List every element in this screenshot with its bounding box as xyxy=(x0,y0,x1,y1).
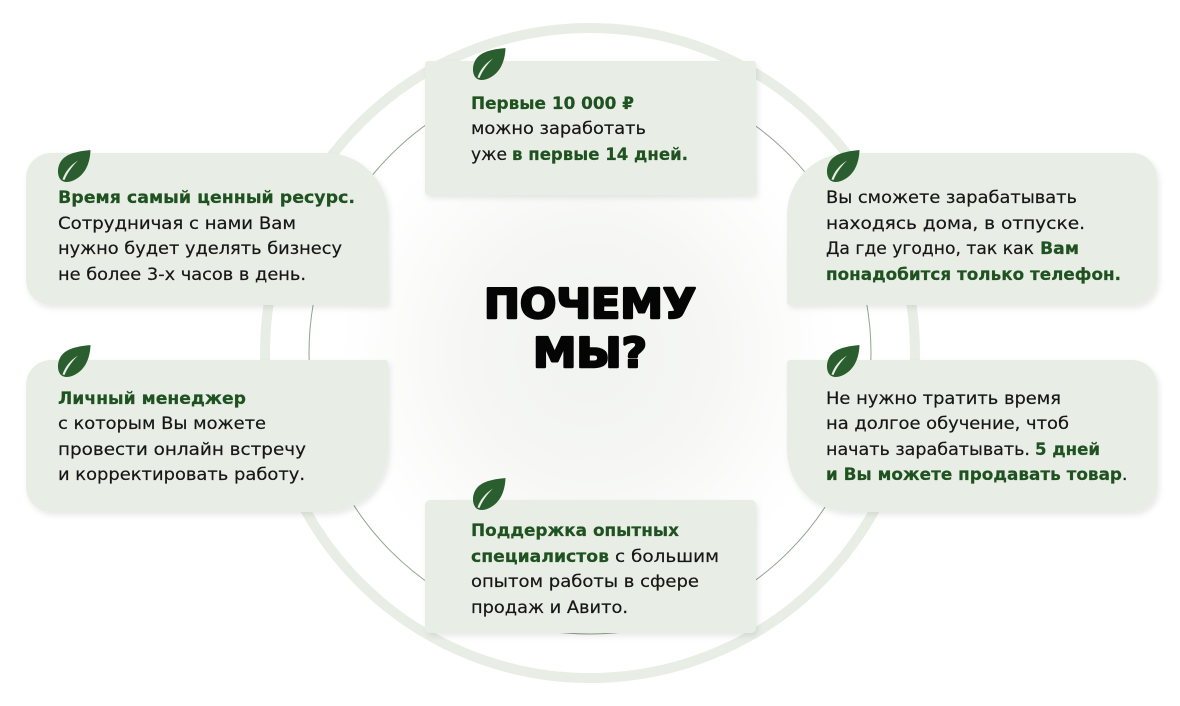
panel text: с большим xyxy=(615,547,719,567)
panel text: не более 3-х часов в день. xyxy=(58,265,306,285)
panel text: 5 дней xyxy=(1035,440,1100,460)
panel text: находясь дома, в отпуске. xyxy=(826,214,1085,234)
panel: first earnings xyxy=(425,48,756,195)
panel text: и корректировать работу. xyxy=(58,465,305,485)
panel text: провести онлайн встречу xyxy=(58,440,306,460)
outer ring xyxy=(265,28,915,678)
panel text: Личный менеджер xyxy=(58,389,246,409)
panel text: опытом работы в сфере xyxy=(471,572,699,592)
inner thin ring xyxy=(309,72,871,634)
panel text: Не нужно тратить время xyxy=(826,389,1061,409)
panel: work from anywhere xyxy=(787,150,1157,305)
panel text: начать зарабатывать. xyxy=(826,440,1030,460)
panel text: . xyxy=(1122,465,1127,485)
panel text: Да где угодно, так как xyxy=(826,239,1034,259)
panel text: Сотрудничая с нами Вам xyxy=(58,214,296,234)
panel text: продаж и Авито. xyxy=(471,598,628,618)
panel text: Вы сможете зарабатывать xyxy=(826,188,1077,208)
panel text: уже xyxy=(471,145,507,165)
title: ПОЧЕМУ xyxy=(484,280,696,328)
icon: leaf xyxy=(827,345,860,377)
icon: leaf xyxy=(473,478,506,510)
panel: personal manager xyxy=(26,345,388,512)
panel text: Первые 10 000 ₽ xyxy=(471,94,634,114)
panel text: Время самый ценный ресурс. xyxy=(58,188,355,208)
icon: leaf xyxy=(58,345,90,377)
panel text: и Вы можете продавать товар xyxy=(826,465,1122,485)
panel text xyxy=(58,188,355,285)
panel text: понадобится только телефон. xyxy=(826,265,1121,285)
panel text: нужно будет уделять бизнесу xyxy=(58,239,342,259)
panel text xyxy=(471,521,719,618)
panel text: в первые 14 дней. xyxy=(512,145,688,165)
panel: time xyxy=(26,150,388,305)
icon: leaf xyxy=(827,150,860,182)
central glow xyxy=(340,103,840,603)
title xyxy=(484,280,696,377)
panel text xyxy=(826,389,1127,485)
panel text xyxy=(471,94,688,165)
icon: leaf xyxy=(58,150,90,182)
panel: expert support xyxy=(425,478,756,633)
panel text: Вам xyxy=(1040,239,1079,259)
title: МЫ? xyxy=(533,329,647,377)
panel text xyxy=(58,389,306,485)
panel text: Поддержка опытных xyxy=(471,521,679,541)
panel text xyxy=(826,188,1121,285)
icon: leaf xyxy=(473,48,506,80)
panel: quick training xyxy=(787,345,1157,512)
panel text: специалистов xyxy=(471,547,609,567)
panel text: можно заработать xyxy=(471,119,646,139)
panel text: на долгое обучение, чтоб xyxy=(826,414,1069,434)
panel text: с которым Вы можете xyxy=(58,414,266,434)
